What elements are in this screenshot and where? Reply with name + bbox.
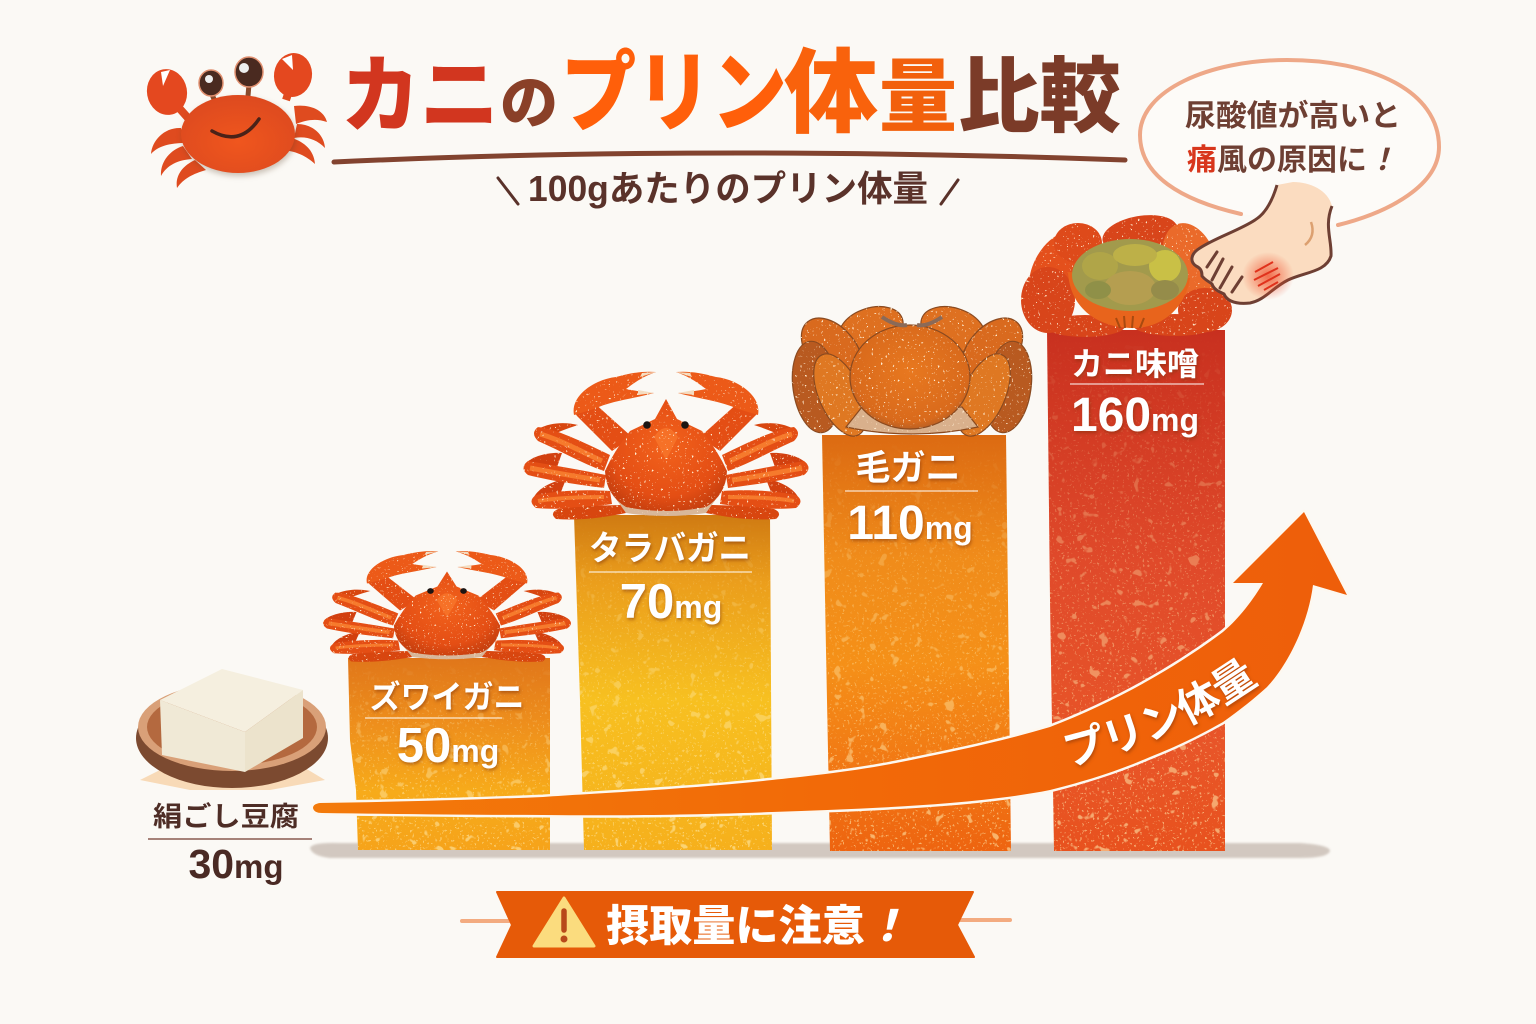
arrow: rising purine level [313,512,1347,818]
tofu value: 30mg [188,841,284,887]
bar divider [365,717,502,719]
bar: silken tofu label [148,801,312,887]
speech bubble [1140,60,1439,225]
icon: tofu on plate [136,669,328,790]
tofu divider [148,838,312,840]
bar speckle texture [1047,330,1225,851]
bar: ズワイガニ [348,658,550,850]
arrow label: プリン体量 [1064,658,1261,768]
tofu name: 絹ごし豆腐 [153,801,299,832]
illustration: zuwai crab [323,551,571,662]
title: プリン [561,44,787,143]
title: 比較 [958,52,1121,143]
warning banner [462,892,1010,957]
bar: カニ味噌 [1047,330,1225,851]
bar name: 毛ガニ [855,449,961,488]
bar speckle texture [822,435,1011,851]
title: 体 [784,43,878,145]
speech bubble: 尿酸値が高いと [1185,99,1401,133]
title: の [500,71,558,136]
icon: warning triangle [534,898,594,946]
bar body [574,515,772,850]
bar body [348,658,550,850]
speech bubble: 痛 [1187,144,1217,177]
bar name: カニ味噌 [1071,346,1199,382]
illustration: taraba crab [524,372,808,520]
bar divider [589,571,752,573]
bar name: タラバガニ [589,530,751,568]
bar speckle texture [574,515,772,850]
bar name: ズワイガニ [370,679,524,715]
icon: foot with gout [1192,182,1332,303]
shadow under bars [310,843,1330,858]
crab shell bowl [1068,272,1190,328]
speech bubble: 風の原因に！ [1217,144,1397,177]
banner text: 摂取量に注意！ [606,903,908,951]
illustration: hairy crab [787,299,1037,444]
crab miso [1072,239,1188,311]
bar: 毛ガニ [822,435,1011,851]
title: 量 [879,53,957,142]
bar value: 50mg [397,719,499,773]
bar body [1047,330,1225,851]
illustration: crab miso in shell [1017,210,1232,337]
bar value: 110mg [847,497,973,550]
bar: タラバガニ [574,515,772,850]
bar speckle texture [348,658,550,850]
bar value: 70mg [620,575,722,629]
icon: cartoon crab [143,51,327,188]
title underline [334,153,1125,162]
bar divider [1070,383,1204,385]
bar value: 160mg [1071,389,1199,442]
title [341,43,1121,145]
subtitle: 100gあたりのプリン体量 [528,168,928,209]
title: カニ [341,49,499,143]
bar divider [845,490,978,492]
bar body [822,435,1011,851]
arrow body [313,512,1347,815]
